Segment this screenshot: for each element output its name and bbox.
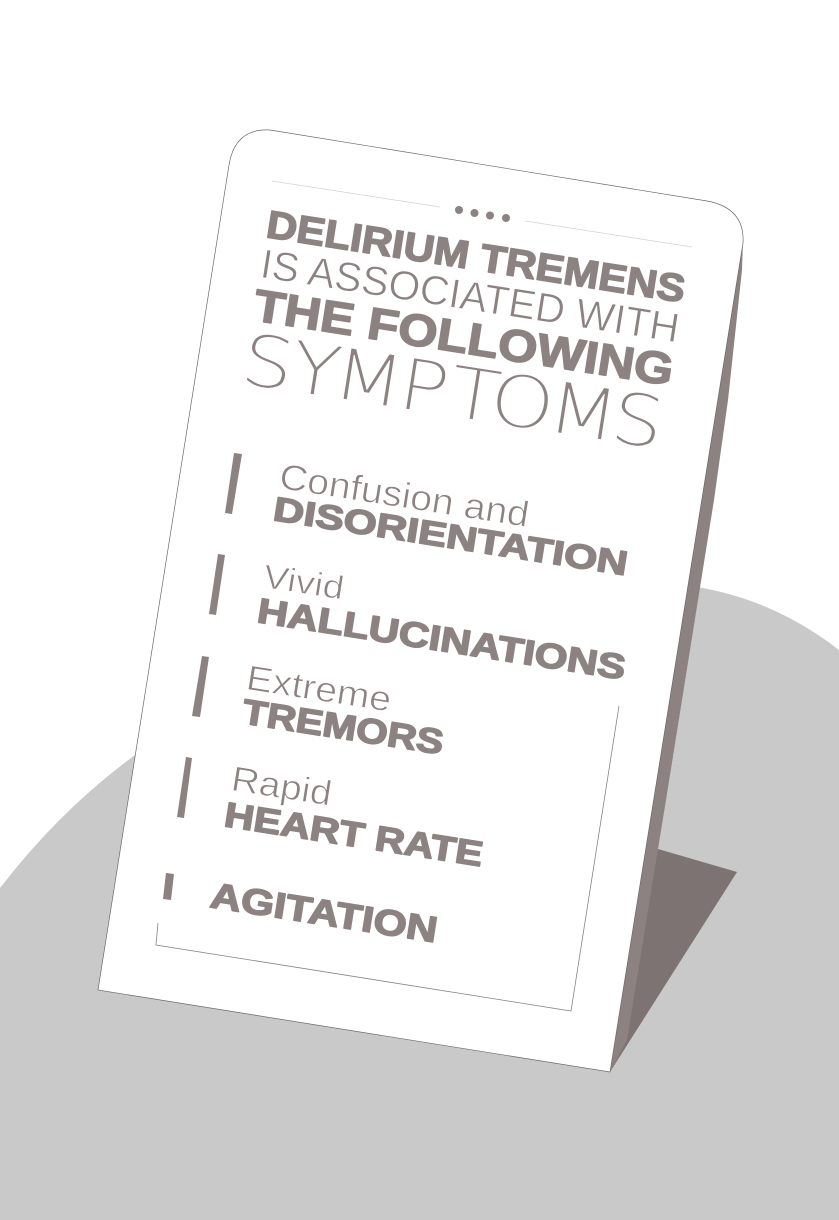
item: confusion and disorientation <box>225 453 630 583</box>
title: THE FOLLOWING <box>250 279 677 395</box>
item: rapid heart rate: Rapid <box>229 759 335 814</box>
item: extreme tremors: TREMORS <box>240 692 446 762</box>
item: extreme tremors: Extreme <box>244 658 394 719</box>
inner frame <box>156 706 619 1011</box>
title: DELIRIUM TREMENS <box>264 203 688 311</box>
card with symptoms <box>98 130 743 1072</box>
item: vivid hallucinations: Vivid <box>261 557 347 606</box>
card side edge <box>610 240 743 1072</box>
four dots <box>455 206 510 222</box>
item: rapid heart rate <box>177 757 486 874</box>
item: agitation <box>163 873 440 950</box>
item: confusion and disorientation: DISORIENTATION <box>271 490 630 583</box>
title: SYMPTOMS <box>236 319 670 466</box>
item: extreme tremors <box>192 656 446 762</box>
title: IS ASSOCIATED WITH <box>258 240 683 351</box>
item: vivid hallucinations <box>209 554 628 687</box>
top rule lines <box>272 181 692 247</box>
card cast shadow <box>610 849 737 1072</box>
item: agitation: AGITATION <box>208 874 440 950</box>
background grey shape <box>0 587 839 1220</box>
item: confusion and disorientation: Confusion and <box>277 455 532 535</box>
card face <box>98 130 743 1072</box>
title <box>236 203 688 466</box>
item: rapid heart rate: HEART RATE <box>222 795 486 874</box>
item: vivid hallucinations: HALLUCINATIONS <box>255 591 628 687</box>
